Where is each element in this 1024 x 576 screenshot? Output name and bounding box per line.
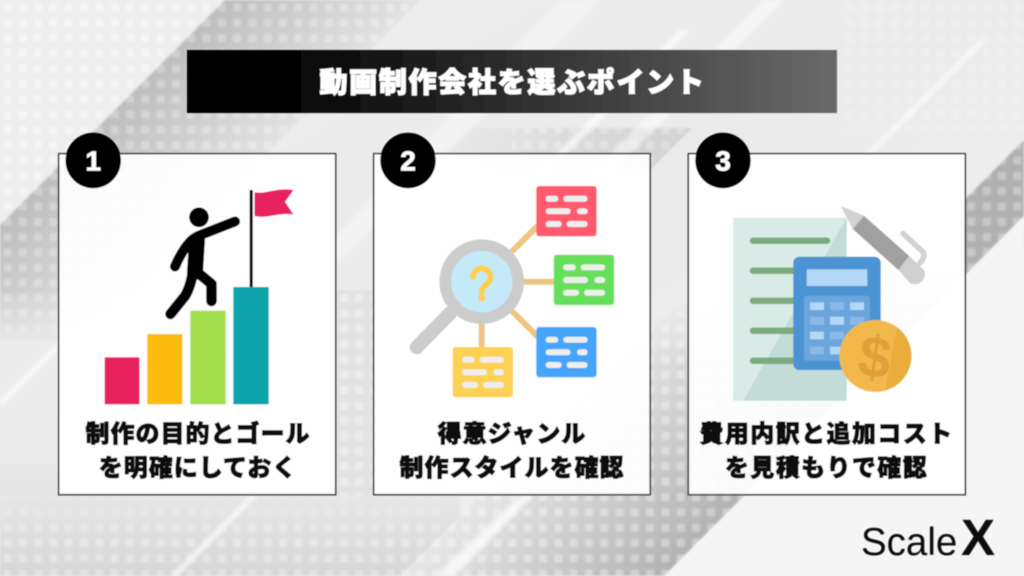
number badge 1 <box>66 133 121 188</box>
title banner <box>187 50 837 113</box>
icon: estimate sheet, calculator, pen, coin: $ <box>854 323 895 392</box>
label: を明確にしておく <box>99 455 297 482</box>
number badge 2 <box>380 133 436 188</box>
panel: point 2 <box>374 133 650 495</box>
icon: magnifier with category cards <box>417 186 614 397</box>
icon: estimate sheet, calculator, pen, coin <box>733 206 925 401</box>
label: 制作スタイルを確認 <box>400 455 624 482</box>
number badge 2: 2 <box>400 146 416 176</box>
number badge 1: 1 <box>85 146 101 176</box>
label: 制作の目的とゴール <box>86 420 310 448</box>
panel: point 1 <box>59 133 336 495</box>
title banner: 動画制作会社を選ぶポイント <box>319 67 706 98</box>
label: を見積もりで確認 <box>725 455 928 482</box>
logo: ScaleX: X <box>961 509 995 566</box>
number badge 3: 3 <box>715 146 731 176</box>
logo: ScaleX <box>861 509 995 566</box>
label: 費用内訳と追加コスト <box>700 421 954 448</box>
icon: climbing bars and flag <box>105 189 294 404</box>
number badge 3 <box>695 133 751 188</box>
panel: point 3 <box>688 133 965 495</box>
logo: ScaleX: Scale <box>861 521 957 564</box>
label: 得意ジャンル <box>438 421 586 448</box>
